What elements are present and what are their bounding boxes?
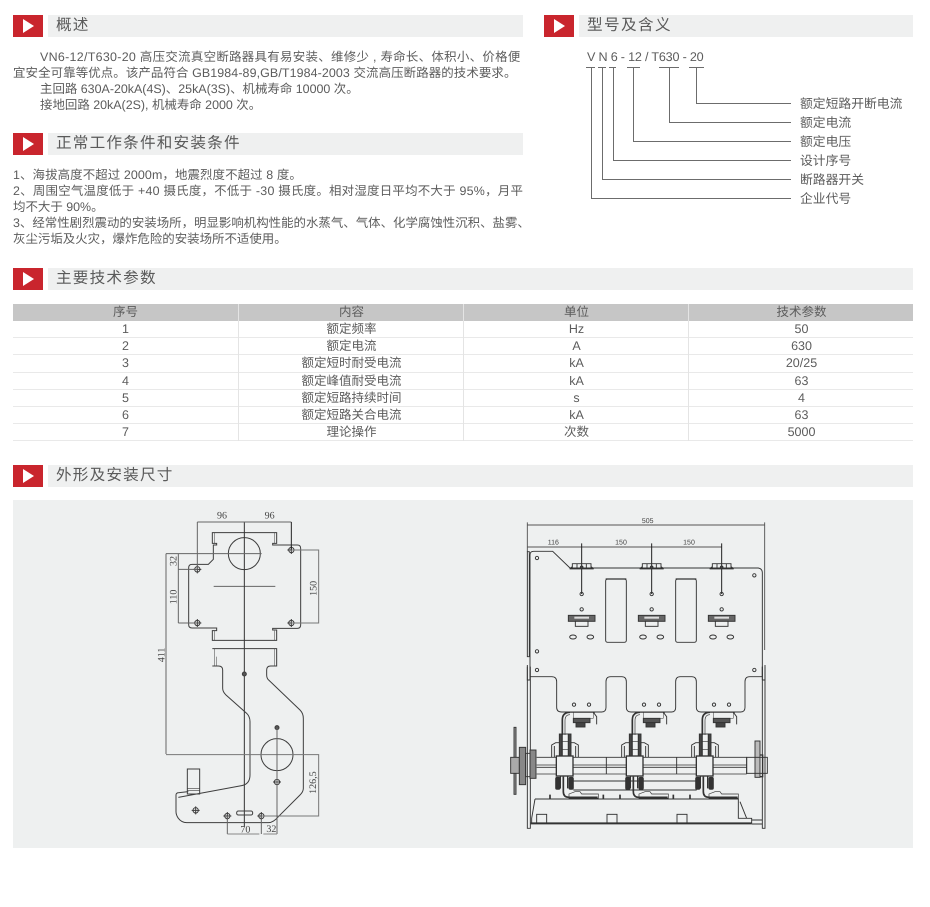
phase hardware: lower xyxy=(552,703,738,798)
panel: dimension drawings xyxy=(13,500,913,848)
row 2: A xyxy=(572,339,581,353)
dimension labels: upper plate xyxy=(156,510,319,662)
dimension labels: front view xyxy=(548,517,695,546)
text block: overview: VN6-12/T630-20 高压交流真空断路器具有易安装、维修少 , 寿命长、体积小、价格便 xyxy=(40,50,521,64)
row 1: Hz xyxy=(569,322,584,336)
dimension labels: front view: 505 xyxy=(642,517,654,525)
row 6: 额定短路关合电流 xyxy=(301,408,402,422)
shaft xyxy=(537,757,747,790)
model code diagram: 断路器开关 xyxy=(800,172,864,187)
text block: overview xyxy=(13,50,521,112)
section heading: model meaning xyxy=(544,15,913,37)
table: technical parameters xyxy=(13,304,913,441)
mounting plate xyxy=(527,551,765,680)
model code diagram: 设计序号 xyxy=(800,153,851,168)
operating handle and shaft ends xyxy=(511,727,767,794)
section heading: working conditions: 正常工作条件和安装条件 xyxy=(56,135,241,152)
row 1 xyxy=(13,321,913,338)
plate cutouts xyxy=(530,667,762,712)
row 5: s xyxy=(573,391,580,405)
section heading: technical parameters xyxy=(13,268,913,290)
model code diagram: V N 6 - 12 / T630 - 20 xyxy=(587,50,703,64)
text block: working conditions: 灰尘污垢及火灾，爆炸危险的安装场所不适使用。 xyxy=(13,232,287,246)
row 2 xyxy=(13,338,913,355)
text block: working conditions: 均不大于 90%。 xyxy=(13,200,104,214)
section heading: technical parameters: 主要技术参数 xyxy=(56,270,157,287)
row 7: 7 xyxy=(122,425,129,439)
table header: 序号 xyxy=(113,305,138,319)
row 6: kA xyxy=(569,408,584,422)
table header: 单位 xyxy=(564,305,589,319)
model code diagram: 额定电流 xyxy=(800,115,851,130)
upper plate xyxy=(189,533,301,640)
dimension labels: front view: 150 xyxy=(615,539,627,546)
section heading: model meaning: 型号及含义 xyxy=(587,17,672,34)
row 7: 理论操作 xyxy=(326,425,376,439)
dimension labels: front view: 150 xyxy=(683,539,695,546)
row 7: 次数 xyxy=(564,425,589,439)
text block: overview: 主回路 630A-20kA(4S)、25kA(3S)、机械寿命 10000 次。 xyxy=(40,82,359,96)
section heading: dimensions: 外形及安装尺寸 xyxy=(56,467,174,484)
text block: working conditions: 1、海拔高度不超过 2000m，地震烈度不超过 8 度。 xyxy=(13,168,302,182)
model code diagram: 企业代号 xyxy=(800,191,851,206)
text block: working conditions xyxy=(13,168,530,246)
row 2: 630 xyxy=(791,339,812,353)
row 7 xyxy=(13,424,913,441)
row 2: 额定电流 xyxy=(326,339,376,353)
row 3 xyxy=(13,355,913,373)
phase hardware: upper xyxy=(568,564,735,639)
dimension lines: front view xyxy=(527,522,765,650)
section heading: working conditions xyxy=(13,133,523,155)
text block: working conditions: 3、经常性剧烈震动的安装场所，明显影响机构性能的水蒸气、气体、化学腐蚀性沉积、盐雾、 xyxy=(13,216,530,230)
model code diagram: 额定电压 xyxy=(800,134,851,149)
frame rails xyxy=(527,667,765,828)
row 4 xyxy=(13,373,913,390)
text block: overview: 接地回路 20kA(2S), 机械寿命 2000 次。 xyxy=(40,98,261,112)
text block: overview: 宜安全可靠等优点。该产品符合 GB1984-89,GB/T1984-2003 交流高压断路器的技术要求。 xyxy=(13,66,516,80)
row 1: 1 xyxy=(122,322,129,336)
dimension labels: upper plate: 96 xyxy=(265,510,275,521)
bottom tray xyxy=(531,795,762,824)
dimension labels: lower bracket: 126,5 xyxy=(307,771,318,794)
dimension lines: upper plate xyxy=(166,522,319,827)
row 6: 6 xyxy=(122,408,129,422)
dimension labels: upper plate: 150 xyxy=(308,581,319,596)
dimension labels: lower bracket: 32 xyxy=(266,823,276,834)
row 4: 4 xyxy=(122,374,129,388)
row 3: 3 xyxy=(122,356,129,370)
row 4: 额定峰值耐受电流 xyxy=(301,374,402,388)
lower bracket xyxy=(176,649,303,823)
table header: 技术参数 xyxy=(776,305,826,319)
table header: 内容 xyxy=(339,305,364,319)
row 5 xyxy=(13,390,913,407)
model code diagram xyxy=(586,50,902,206)
table header xyxy=(13,304,913,320)
row 3: kA xyxy=(569,356,584,370)
row 6: 63 xyxy=(795,408,808,422)
row 4: 63 xyxy=(795,374,808,388)
row 6 xyxy=(13,407,913,424)
row 3: 额定短时耐受电流 xyxy=(301,356,402,370)
dimension labels: upper plate: 32 xyxy=(168,556,179,566)
dimension labels: upper plate: 411 xyxy=(156,648,167,662)
dimension labels: lower bracket: 70 xyxy=(240,824,250,835)
dimension labels: front view: 116 xyxy=(548,539,559,546)
row 2: 2 xyxy=(122,339,129,353)
section heading: dimensions xyxy=(13,465,913,487)
row 3: 20/25 xyxy=(786,356,817,370)
row 5: 额定短路持续时间 xyxy=(301,391,402,405)
section heading: overview: 概述 xyxy=(56,17,90,34)
dimension lines: lower bracket xyxy=(166,728,319,834)
text block: working conditions: 2、周围空气温度低于 +40 摄氏度，不低于 -30 摄氏度。相对湿度日平均不大于 95%，月平 xyxy=(13,184,523,198)
dimension labels: lower bracket xyxy=(240,771,318,835)
row 7: 5000 xyxy=(788,425,815,439)
row 5: 5 xyxy=(122,391,129,405)
section heading: overview xyxy=(13,15,523,37)
row 4: kA xyxy=(569,374,584,388)
row 5: 4 xyxy=(798,391,805,405)
row 1: 50 xyxy=(795,322,808,336)
dimension labels: upper plate: 110 xyxy=(168,590,179,604)
dimension labels: upper plate: 96 xyxy=(217,510,227,521)
row 1: 额定频率 xyxy=(326,322,376,336)
model code diagram: 额定短路开断电流 xyxy=(800,96,902,111)
